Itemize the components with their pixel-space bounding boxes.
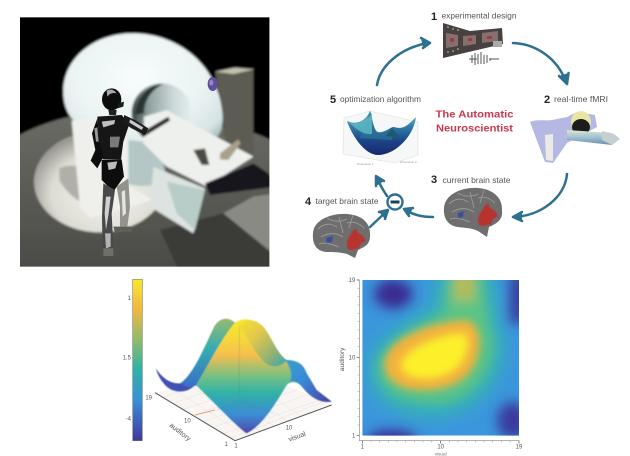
step 2 label: 2 (544, 94, 550, 106)
step 1 label: experimental design (442, 12, 517, 20)
arrow: step 2 to 3 (513, 174, 567, 221)
axis labels: 10 (286, 425, 293, 431)
step 3 label (431, 174, 511, 186)
step 5 label: optimization algorithm (340, 95, 421, 104)
axis labels: 1 (225, 442, 229, 448)
heatmap axis labels: 19 (516, 445, 523, 451)
panel: 2D heatmap (339, 267, 528, 456)
panel: 3D surface plot (123, 279, 332, 449)
heatmap axis labels: 10 (437, 445, 445, 451)
heatmap axis labels (339, 278, 523, 456)
step 5 label (330, 94, 421, 106)
axis labels: 10 (184, 419, 191, 425)
surface back ridge (180, 319, 235, 387)
robot (91, 88, 148, 256)
icon: current brain state (444, 188, 502, 237)
colorbar: 1.5 (123, 355, 132, 361)
step 5 label: 5 (330, 94, 336, 106)
colorbar (123, 279, 142, 441)
axis labels: visual (288, 431, 307, 444)
robot legs (102, 183, 115, 236)
step 4 label: 4 (305, 196, 312, 208)
icon: real-time fMRI scanner (530, 111, 620, 163)
icon: optimization bowl: Dimension 2 (400, 160, 417, 164)
logo on scanner (208, 77, 218, 91)
heatmap field (362, 280, 519, 436)
step 1 label: 1 (431, 11, 437, 23)
surface left dip (156, 357, 202, 392)
heatmap axis labels: auditory (339, 347, 346, 371)
step 4 label (305, 196, 379, 208)
robot arms (91, 118, 103, 168)
floor grid (155, 367, 332, 441)
icon: film strip and waveform (443, 23, 503, 65)
title: The Automatic (436, 108, 514, 120)
axis labels: 19 (145, 395, 153, 401)
axis labels: 1 (234, 443, 238, 449)
step 3 label: current brain state (442, 176, 511, 185)
panel: automatic neuroscientist cycle: Neuroscientist (436, 122, 514, 134)
axis labels (145, 395, 307, 449)
heatmap axis labels: 1 (361, 445, 365, 451)
colorbar: 1 (128, 296, 132, 302)
step 4 label: target brain state (316, 197, 379, 206)
robot head (102, 88, 121, 110)
arrow: step 3 to minus (404, 208, 433, 217)
step 2 label (544, 94, 608, 106)
robot torso (97, 115, 129, 159)
heatmap axis labels: 10 (349, 355, 356, 361)
arrow: step 5 to 1 (377, 38, 430, 85)
icon: optimization bowl: Dimension 1 (357, 162, 374, 166)
heatmap axis labels: 19 (349, 278, 356, 284)
panel: robot operating MRI scanner photo (20, 17, 270, 267)
surface right fold (239, 320, 287, 366)
arrow: step 4 to minus (370, 210, 388, 227)
step 1 label (431, 11, 517, 23)
step 3 label: 3 (431, 174, 437, 186)
heatmap axis labels: 1 (352, 434, 356, 440)
colorbar: -4 (126, 416, 132, 422)
arrow: step 1 to 2 (513, 43, 568, 84)
icon: optimization bowl (343, 111, 418, 166)
arrow: minus to step 5 (376, 176, 387, 196)
axis labels: auditory (168, 422, 192, 443)
panel: automatic neuroscientist cycle (305, 11, 620, 258)
axes and ticks (357, 280, 519, 443)
step 2 label: real-time fMRI (554, 95, 608, 104)
icon: minus comparator (388, 194, 402, 210)
surface main front (196, 319, 332, 433)
icon: target brain state (313, 214, 370, 258)
